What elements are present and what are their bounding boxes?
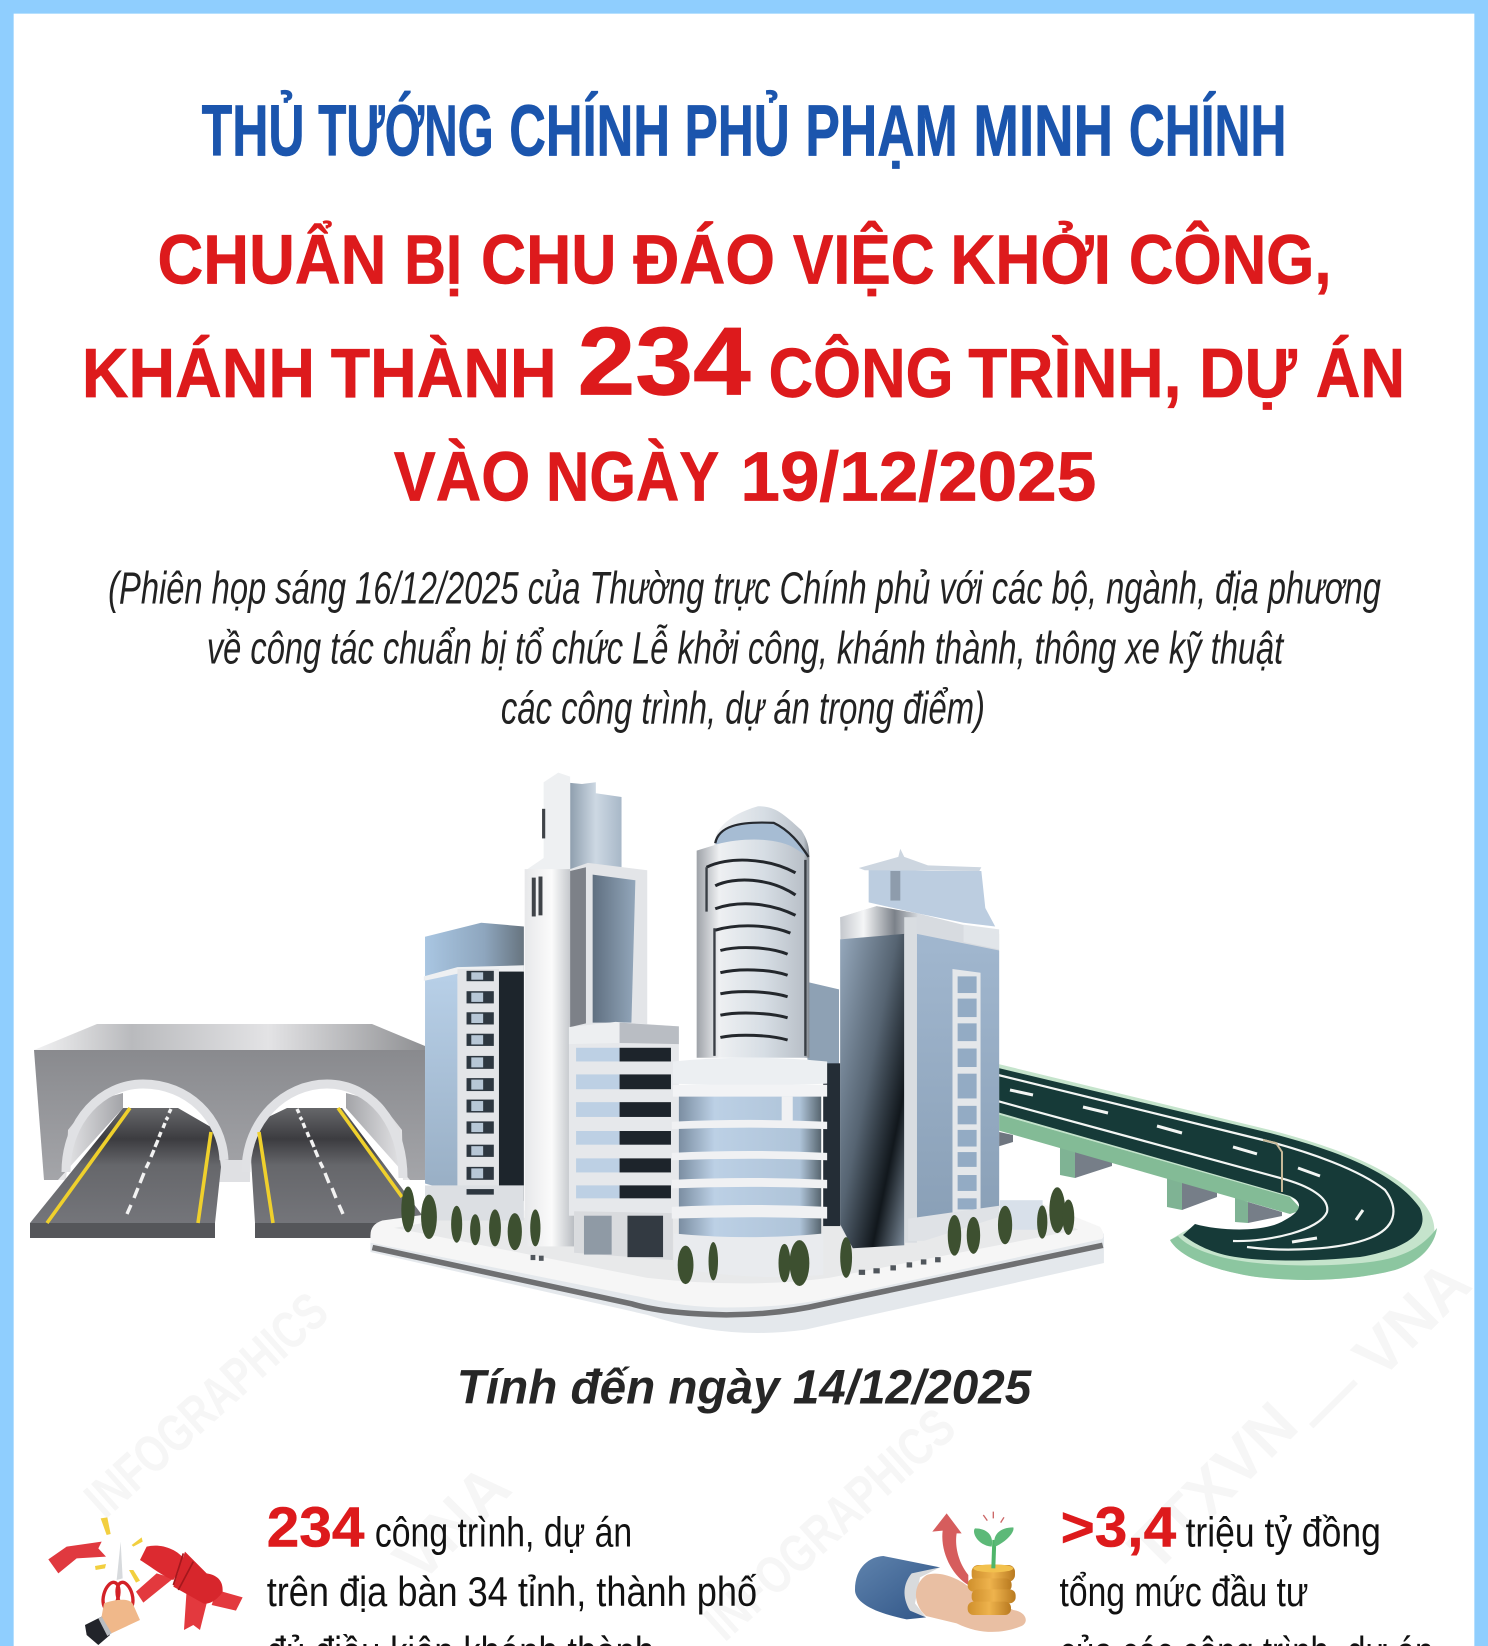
- title: prime minister name: [202, 90, 1286, 171]
- title: prime minister name: THỦ: [202, 90, 305, 171]
- icon: building complex: [370, 773, 1104, 1333]
- watermark: — VNA: [1284, 1248, 1484, 1448]
- description: [1060, 1508, 1433, 1646]
- heading: main red headline: 234: [578, 309, 751, 416]
- heading: main red headline: [82, 220, 1405, 516]
- title: prime minister name: TƯỚNG: [318, 90, 494, 171]
- left road: [30, 1108, 221, 1223]
- description: trên địa bàn 34 tỉnh, thành phố: [267, 1568, 757, 1615]
- watermark: [74, 1248, 1484, 1646]
- small annex: [1000, 1200, 1043, 1230]
- tallest tower: [525, 773, 647, 1246]
- watermark: VNA: [380, 1452, 524, 1595]
- icon: curved elevated highway: [990, 1062, 1437, 1280]
- icon: ribbon cutting: [48, 1517, 243, 1645]
- stat: total investment: [1060, 1496, 1433, 1646]
- value 234: 234: [267, 1496, 365, 1559]
- heading: main red headline: KHỞI: [950, 220, 1111, 298]
- title: prime minister name: PHỦ: [685, 90, 790, 171]
- icon: twin road tunnel: [30, 1024, 428, 1238]
- heading: main red headline: KHÁNH: [82, 334, 315, 412]
- heading: main red headline: CHU: [481, 220, 616, 298]
- back mid block: [807, 982, 843, 1226]
- description: [267, 1508, 757, 1646]
- value 3,4: >3,4: [1061, 1496, 1177, 1559]
- heading: main red headline: THÀNH: [331, 334, 557, 412]
- heading: main red headline: ÁN: [1316, 334, 1405, 412]
- illustration: tunnel, buildings and highway: [30, 773, 1437, 1645]
- date heading: Tính đến ngày 14/12/2025: [457, 1361, 1032, 1415]
- front striped block: [569, 1022, 679, 1260]
- heading: main red headline: ĐÁO: [633, 220, 775, 298]
- heading: main red headline: CÔNG: [769, 334, 953, 412]
- title: prime minister name: PHẠM: [805, 90, 958, 171]
- curbside blocks: [531, 1255, 941, 1275]
- right tower: [840, 849, 999, 1248]
- round tower: [697, 806, 809, 1058]
- heading: main red headline: BỊ: [404, 220, 462, 298]
- heading: main red headline: CHUẨN: [158, 220, 386, 298]
- heading: main red headline: TRÌNH,: [968, 334, 1181, 412]
- description: công trình, dự án: [375, 1508, 632, 1555]
- arch rims: [66, 1084, 224, 1172]
- description: triệu tỷ đồng: [1186, 1508, 1381, 1555]
- heading: main red headline: CÔNG,: [1129, 220, 1332, 298]
- title: prime minister name: CHÍNH: [1129, 90, 1286, 171]
- heading: main red headline: DỰ: [1199, 334, 1297, 412]
- subtitle: meeting note: [108, 563, 1381, 733]
- description: tổng mức đầu tư: [1060, 1568, 1308, 1615]
- left glass tower: [424, 923, 524, 1221]
- heading: main red headline: 19/12/2025: [740, 438, 1096, 516]
- tunnel openings: [66, 1085, 224, 1180]
- icon: hand with coins and sprout: [855, 1512, 1026, 1632]
- watermark: TTXVN: [1116, 1389, 1311, 1585]
- title: prime minister name: CHÍNH: [509, 90, 670, 171]
- heading: main red headline: NGÀY: [546, 438, 719, 516]
- stat: 234 projects: [267, 1496, 757, 1646]
- right road: [250, 1108, 428, 1223]
- heading: main red headline: VIỆC: [793, 220, 935, 298]
- watermark: INFOGRAPHICS: [74, 1281, 339, 1529]
- subtitle: meeting note: các công trình, dự án trọng điểm): [501, 682, 985, 733]
- heading: main red headline: VÀO: [394, 438, 530, 516]
- watermark: INFOGRAPHICS: [693, 1397, 967, 1646]
- trees: [401, 1186, 1074, 1286]
- title: prime minister name: MINH: [973, 90, 1113, 171]
- building platform: [370, 1204, 1104, 1333]
- round podium: [672, 1058, 827, 1277]
